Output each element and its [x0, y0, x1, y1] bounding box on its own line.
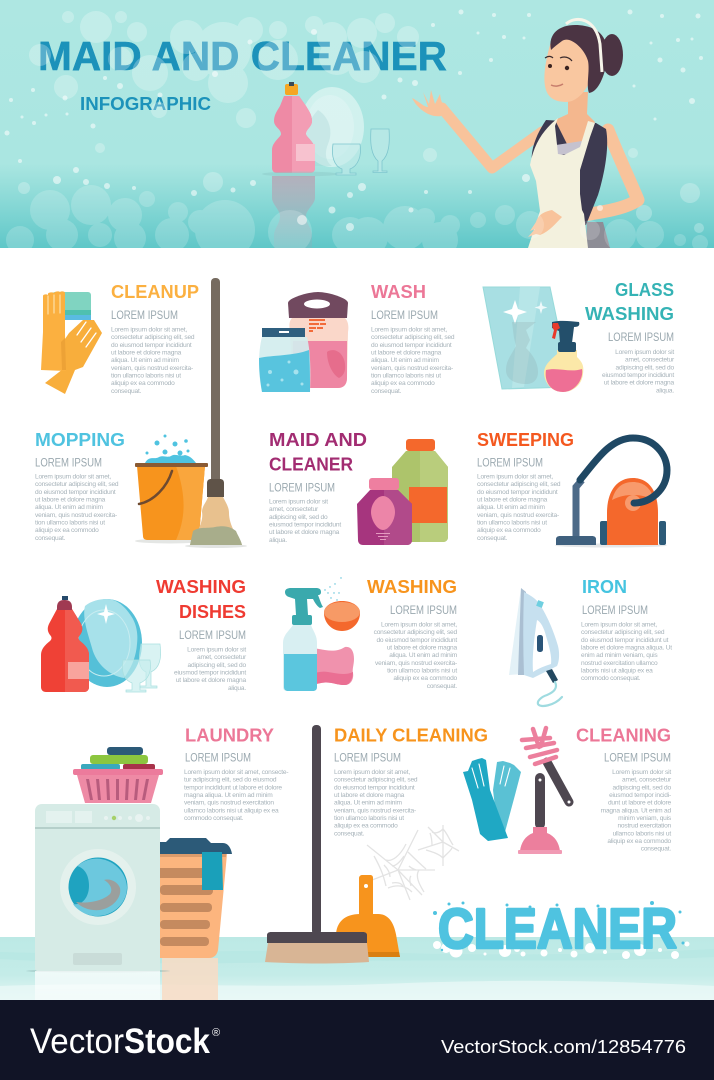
icon: tall mop	[185, 278, 247, 548]
body text: nostrud exercitation ullamco	[581, 660, 658, 667]
watermark url: VectorStock.com/12854776	[441, 1036, 686, 1057]
heading line: cleaner: CLEANER	[269, 454, 354, 475]
heading: washing: WASHING	[367, 576, 457, 597]
body text: Lorem ipsum dolor sit amet,	[381, 622, 457, 628]
woman head	[544, 38, 594, 102]
body text: tion ullamco laboris nisi ut	[35, 520, 105, 527]
body text: consectetur adipiscing elit, sed	[581, 629, 665, 636]
icon: vacuum cleaner	[555, 438, 667, 548]
body text: nostrud exercitation	[617, 823, 672, 830]
body text: do eiusmod tempor incididunt ut	[581, 637, 669, 644]
body text: do eiusmod tempor incididunt	[477, 489, 558, 496]
body text: ut labore et dolore magna	[477, 497, 548, 504]
body text: consectetur adipiscing elit, sed	[371, 334, 455, 341]
body text: consectetur adipiscing elit, sed	[374, 629, 458, 636]
woman left hand	[412, 90, 447, 116]
body text: magna aliqua. Ut enim ad minim	[184, 792, 273, 799]
body text: minim veniam, quis	[618, 815, 672, 822]
heading: maid and cleaner	[269, 429, 367, 475]
header gradient background	[0, 0, 714, 248]
subheading: LOREM IPSUM	[390, 604, 457, 617]
heading: cleaning: CLEANING	[576, 725, 671, 746]
body text: aliqua.	[269, 537, 287, 544]
footer background	[0, 1000, 714, 1080]
woman apron	[528, 118, 595, 248]
body text: Lorem ipsum dolor sit amet,	[477, 474, 553, 480]
panel: maid and cleaner	[269, 429, 448, 545]
body text: consectetur adipiscing elit, sed	[334, 777, 418, 784]
heading: daily cleaning: DAILY CLEANING	[334, 725, 488, 746]
icon: cleaning bottles	[357, 439, 448, 545]
body text: ut labore et dolore magna	[604, 380, 675, 387]
body text: tion ullamco laboris nisi ut	[334, 815, 404, 822]
icon: bucket with foam	[135, 434, 208, 544]
body text: aliqua.	[228, 685, 246, 692]
floor band	[0, 937, 714, 1000]
body text: consequat.	[477, 535, 508, 542]
title: MAID AND CLEANER	[38, 33, 447, 79]
heading: sweeping: SWEEPING	[477, 429, 574, 450]
woman dress	[532, 120, 607, 225]
body text: do eiusmod tempor incididunt	[376, 637, 457, 644]
body text: aliqua. Ut enim ad minim	[371, 357, 439, 364]
body text: eiusmod tempor incidi-	[609, 792, 671, 799]
subheading: LOREM IPSUM	[334, 752, 401, 765]
heading: washing dishes	[156, 576, 246, 622]
panel: cleanup	[41, 281, 199, 395]
body text: adipiscing elit, sed do	[188, 662, 247, 669]
body text: Lorem ipsum dolor sit	[269, 498, 328, 506]
woman hand on hip	[528, 210, 562, 237]
icon: yellow gloves and sponge	[41, 291, 102, 394]
body text: veniam, quis nostrud exercita-	[371, 365, 453, 372]
subheading: LOREM IPSUM	[179, 629, 246, 642]
body text: consequat.	[641, 846, 671, 853]
body text: ut labore et dolore magna	[387, 645, 458, 652]
body text: eiusmod tempor incididunt	[269, 522, 341, 529]
heading line: maid and: MAID AND	[269, 429, 367, 450]
subheading: LOREM IPSUM	[111, 309, 178, 322]
body text: Lorem ipsum dolor sit	[612, 769, 671, 776]
body text: consequat.	[427, 683, 457, 690]
panel: daily cleaning	[265, 725, 488, 964]
subheading: LOREM IPSUM	[371, 309, 438, 322]
body text: aliquip ex ea commodo	[334, 823, 398, 830]
body text: tion ullamco laboris nisi ut	[387, 668, 457, 675]
body text: adipiscing elit, sed do	[616, 364, 675, 371]
body text: consequat.	[35, 535, 66, 542]
body text: consectetur adipiscing elit, sed	[477, 481, 561, 488]
body text: aliqua. Ut enim ad minim	[35, 504, 103, 511]
body text: veniam, quis nostrud exercita-	[477, 512, 559, 519]
body text: ut labore et dolore magna	[371, 350, 442, 357]
body text: aliquip ex ea commodo	[35, 527, 99, 534]
heading: iron: IRON	[582, 576, 627, 597]
body text: veniam, quis nostrud exercita-	[111, 365, 193, 372]
heading: cleanup: CLEANUP	[111, 281, 199, 302]
subheading: LOREM IPSUM	[608, 331, 674, 344]
body text: consectetur adipiscing elit, sed	[111, 334, 195, 341]
watermark logo: ®	[212, 1027, 220, 1039]
footer bar	[0, 1000, 714, 1080]
body text: amet, consectetur	[269, 506, 319, 513]
icon: blue rubber gloves	[463, 758, 521, 841]
woman headband	[566, 19, 602, 72]
body text: do eiusmod tempor incididunt	[334, 784, 415, 791]
panel: sweeping	[477, 429, 667, 548]
body text: veniam, quis nostrud exercita-	[334, 807, 416, 814]
body text: Lorem ipsum dolor sit amet,	[111, 326, 187, 334]
body text: aliqua.	[656, 387, 674, 394]
body text: consequat.	[371, 388, 402, 395]
body text: aliqua. Ut enim ad minim	[389, 652, 458, 659]
body text: eiusmod tempor incididunt	[174, 670, 246, 677]
body text: tion ullamco laboris nisi ut	[371, 373, 441, 380]
heading: laundry: LAUNDRY	[185, 725, 275, 746]
body text: aliquip ex ea commodo	[371, 380, 435, 387]
panel: washing	[283, 576, 458, 691]
body text: Lorem ipsum dolor sit amet, consecte-	[184, 769, 288, 776]
woman hair	[550, 25, 623, 93]
panel: iron	[509, 576, 672, 706]
icon: header pink bottle	[262, 82, 338, 248]
body text: ut labore et dolore magna	[334, 792, 405, 799]
body text: Lorem ipsum dolor sit	[615, 349, 674, 356]
body text: aliquip ex ea commodo	[607, 838, 672, 845]
body text: tempor incididunt ut labore et dolore	[184, 784, 282, 791]
soap bubbles: large	[18, 11, 704, 233]
body text: laboris nisi ut aliquip ex ea	[581, 668, 653, 675]
woman character	[412, 19, 638, 248]
body text: adipiscing elit, sed do	[613, 784, 672, 791]
body text: Lorem ipsum dolor sit amet,	[581, 622, 657, 628]
body text: veniam, quis nostrud exercitation	[184, 800, 274, 807]
woman arms	[442, 108, 638, 220]
subheading: LOREM IPSUM	[185, 752, 251, 765]
body text: tur adipiscing elit, sed do eiusmod	[184, 777, 277, 784]
body text: dunt ut labore et dolore	[608, 800, 672, 807]
body text: aliqua. Ut enim ad minim	[111, 357, 179, 364]
heading: wash: WASH	[371, 281, 426, 302]
woman face details	[545, 56, 572, 86]
body text: do eiusmod tempor incididunt	[35, 489, 116, 496]
body text: veniam, quis nostrud exercita-	[375, 660, 457, 667]
body text: aliquip ex ea commodo	[393, 675, 458, 682]
body text: tion ullamco laboris nisi ut	[477, 520, 547, 527]
body text: aliqua. Ut enim ad minim	[334, 800, 402, 807]
subheading: LOREM IPSUM	[604, 752, 671, 765]
body text: commodo consequat.	[184, 815, 244, 822]
subheading: LOREM IPSUM	[269, 482, 335, 495]
body text: Lorem ipsum dolor sit amet,	[334, 769, 410, 776]
body text: tion ullamco laboris nisi ut	[111, 373, 181, 380]
body text: ut labore et dolore magna	[111, 350, 182, 357]
body text: aliquip ex ea commodo	[111, 380, 175, 387]
logo foam bubbles	[433, 941, 690, 959]
panel: cleaning	[463, 725, 672, 854]
body text: ullamco laboris nisi ut	[613, 830, 671, 837]
body text: ut labore et dolore magna	[269, 529, 340, 536]
heading line: washing: WASHING	[585, 303, 674, 324]
panel: wash	[259, 281, 455, 395]
body text: do eiusmod tempor incididunt	[371, 342, 452, 349]
body text: enim ad minim veniam, quis	[581, 652, 658, 659]
heading: glass washing	[585, 279, 674, 324]
subheading: LOREM IPSUM	[35, 456, 102, 470]
icon: iron	[509, 588, 562, 706]
body text: ut labore et dolore magna	[35, 497, 106, 504]
body text: amet, consectetur	[625, 357, 675, 364]
heading line: dishes: DISHES	[179, 601, 246, 622]
body text: do eiusmod tempor incididunt	[111, 342, 192, 349]
body text: consequat.	[334, 830, 365, 837]
icon: window glass with spray bottle	[483, 287, 583, 392]
body text: consequat.	[111, 388, 142, 395]
soap bubbles: tiny	[4, 10, 703, 231]
icon: orange dustpan	[336, 875, 400, 957]
icon: pink basket with folded clothes	[73, 747, 163, 803]
icon: spray bottle and sponges	[283, 577, 360, 691]
soap clouds: bottom	[6, 185, 708, 260]
icon: plunger	[518, 773, 562, 854]
body text: amet, consectetur	[622, 777, 672, 784]
icon: plate, red bottle and glasses	[41, 596, 161, 692]
icon: header plate	[300, 87, 364, 167]
subtitle: INFOGRAPHIC	[80, 94, 211, 114]
body text: Lorem ipsum dolor sit amet,	[371, 326, 447, 334]
body text: consectetur adipiscing elit, sed	[35, 481, 119, 488]
icon: toilet brush	[522, 728, 570, 804]
body text: aliqua. Ut enim ad minim	[477, 504, 545, 511]
panel: laundry	[26, 725, 288, 1000]
watermark logo: VectorStock	[30, 1022, 219, 1061]
body text: amet, consectetur	[197, 654, 247, 661]
body text: aliquip ex ea commodo	[477, 527, 541, 534]
subheading: LOREM IPSUM	[477, 456, 543, 470]
body text: labore et dolore magna aliqua. Ut	[581, 645, 672, 652]
subheading: LOREM IPSUM	[582, 604, 648, 617]
icon: laundry hamper	[160, 838, 232, 1000]
body text: ut labore et dolore magna	[176, 677, 247, 684]
body text: magna aliqua. Ut enim ad	[601, 807, 672, 814]
panel: washing dishes	[41, 576, 247, 692]
icon: header glasses	[332, 129, 389, 175]
heading: mopping: MOPPING	[35, 429, 125, 450]
woman neck	[555, 92, 595, 148]
icon: washing machine	[26, 804, 170, 1000]
body text: Lorem ipsum dolor sit	[187, 646, 246, 654]
icon: tall push broom	[265, 725, 369, 964]
cleaner bubble logo	[433, 897, 690, 961]
body text: adipiscing elit, sed do	[269, 514, 328, 521]
body text: Lorem ipsum dolor sit amet,	[35, 474, 111, 480]
body text: ullamco laboris nisi ut aliquip ex ea	[184, 807, 279, 814]
panel: glass washing	[483, 279, 675, 394]
body text: eiusmod tempor incididunt	[602, 372, 674, 379]
icon: detergent bags	[259, 292, 348, 392]
panel: mopping	[35, 429, 208, 544]
heading line: washing: WASHING	[156, 576, 246, 597]
body text: commodo consequat.	[581, 675, 641, 682]
icon: cobwebs	[367, 825, 459, 900]
panel: header banner	[0, 0, 714, 260]
heading line: glass: GLASS	[615, 279, 674, 300]
logo blue drops	[433, 901, 684, 951]
body text: veniam, quis nostrud exercita-	[35, 512, 117, 519]
logo word: CLEANER	[438, 897, 677, 961]
